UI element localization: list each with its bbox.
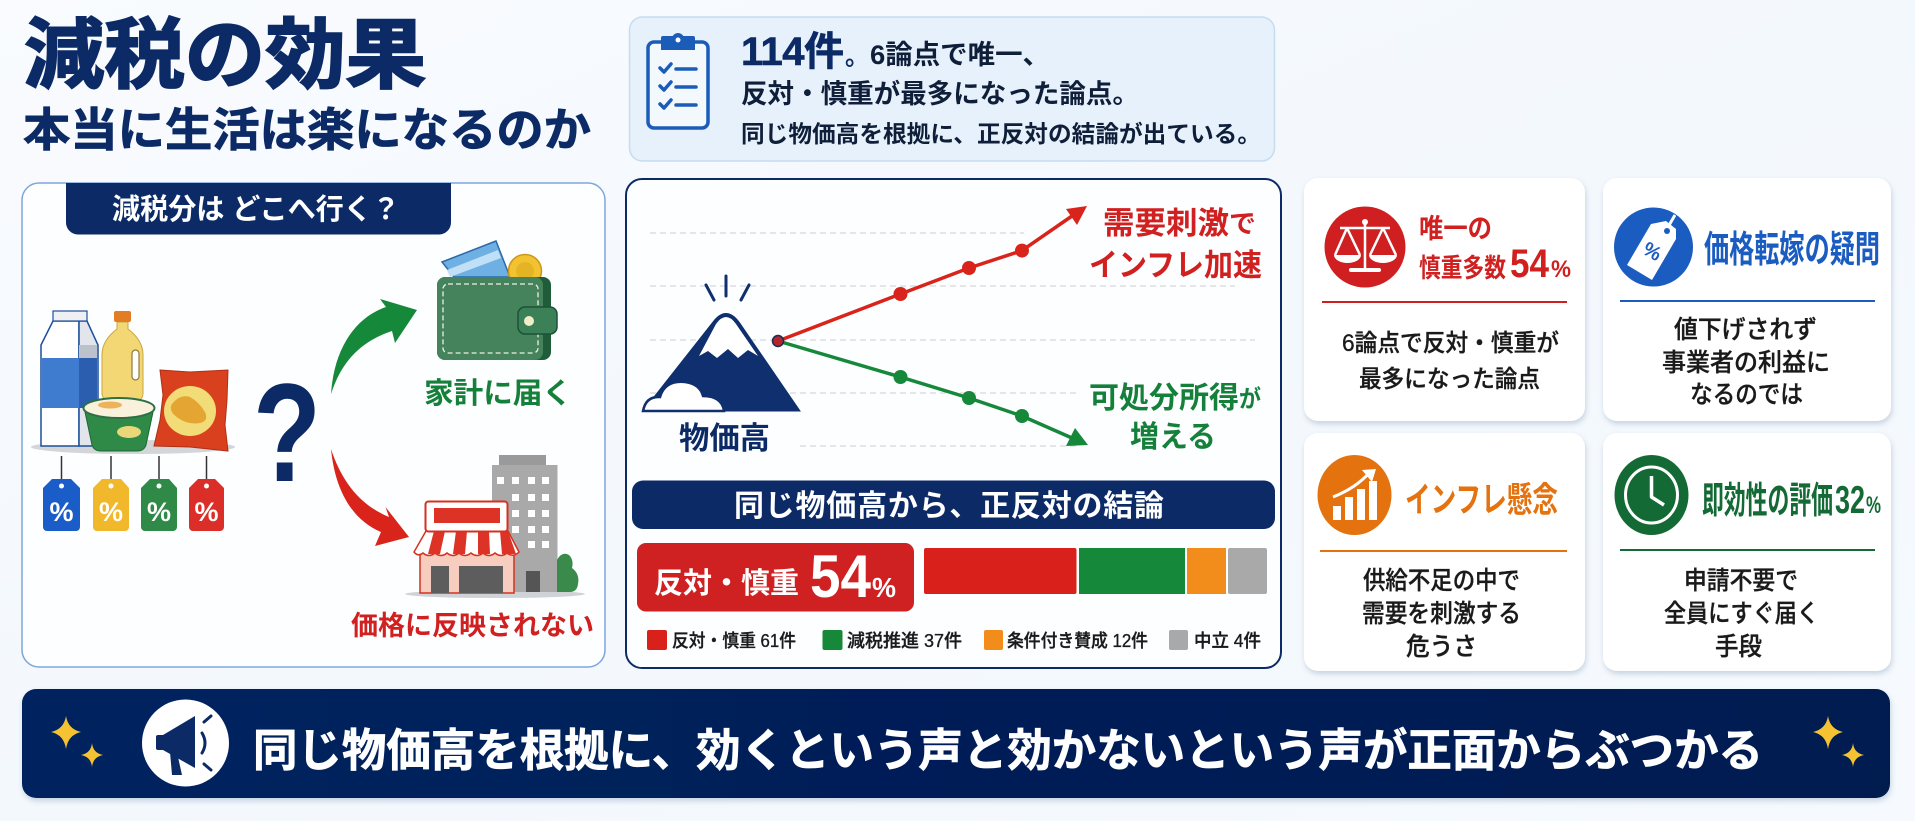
card heading: 32 bbox=[1835, 479, 1865, 522]
icon: rising chart bbox=[1318, 455, 1392, 535]
label: not reflected in prices: 価格に反映されない bbox=[351, 611, 594, 641]
title bbox=[23, 13, 591, 156]
chart legend: 条件付き賛成 12件 bbox=[1007, 631, 1148, 651]
icon: percent tags: % bbox=[49, 497, 74, 527]
banner text: 同じ物価高を根拠に、効くという声と効かないという声が正面からぶつかる bbox=[253, 725, 1763, 776]
chart origin dot bbox=[772, 336, 784, 346]
icon: price tag bbox=[1614, 208, 1693, 286]
card text bbox=[1342, 330, 1559, 393]
card text: 需要を刺激する bbox=[1362, 600, 1521, 628]
panel: same prices, opposite conclusions bbox=[626, 179, 1281, 668]
arrow: green to household bbox=[331, 299, 417, 394]
bottom banner bbox=[22, 689, 1890, 798]
card: price pass-through doubt bbox=[1603, 178, 1891, 421]
summary text: 。 bbox=[845, 41, 869, 71]
summary text: 同じ物価高を根拠に、正反対の結論が出ている。 bbox=[741, 120, 1261, 147]
card heading: 54 bbox=[1510, 242, 1550, 286]
icon: percent tags: % bbox=[147, 497, 171, 527]
icon: percent tags: % bbox=[194, 497, 219, 527]
icon: question mark: ? bbox=[253, 354, 321, 511]
icon: sparkles right bbox=[1813, 716, 1864, 767]
icon: clock bbox=[1614, 455, 1688, 535]
icon: percent tags bbox=[43, 456, 224, 531]
card heading: 唯一の bbox=[1419, 214, 1492, 244]
icon: shop and office building bbox=[405, 455, 585, 598]
icon: wallet bbox=[437, 241, 557, 360]
badge: opposition 54%: 54 bbox=[810, 543, 872, 610]
icon: clipboard bbox=[648, 33, 708, 128]
summary text bbox=[741, 30, 1261, 147]
chart line: green down bbox=[778, 341, 1088, 446]
label: disposable income bbox=[1089, 382, 1261, 454]
card heading: % bbox=[1551, 256, 1571, 283]
label: demand stimulus: 需要刺激 bbox=[1103, 206, 1229, 241]
label: demand stimulus: で bbox=[1229, 209, 1256, 239]
icon: groceries bbox=[31, 311, 235, 454]
conclusion banner bbox=[632, 480, 1275, 529]
card text bbox=[1362, 567, 1521, 661]
chart legend bbox=[647, 630, 1261, 651]
panel heading bbox=[66, 183, 451, 234]
label: disposable income: が bbox=[1239, 385, 1261, 413]
arrow: red to shop bbox=[331, 449, 409, 546]
card: inflation concern bbox=[1304, 433, 1585, 671]
panel heading: 減税分は どこへ行く？ bbox=[112, 193, 400, 226]
title: 本当に生活は楽になるのか bbox=[23, 104, 591, 156]
icon: sparkles left bbox=[51, 716, 103, 767]
card heading: 慎重多数 bbox=[1419, 253, 1506, 283]
stacked bar chart bbox=[924, 548, 1267, 594]
summary text: 114件 bbox=[741, 30, 844, 74]
icon: mountain bbox=[643, 276, 800, 411]
chart legend: 中立 4件 bbox=[1194, 631, 1261, 651]
chart legend: 減税推進 37件 bbox=[847, 631, 962, 651]
label: demand stimulus: インフレ加速 bbox=[1089, 248, 1262, 283]
card text bbox=[1662, 316, 1830, 409]
card heading: % bbox=[1866, 492, 1881, 519]
card text: なるのでは bbox=[1690, 381, 1803, 409]
icon: megaphone bbox=[142, 700, 229, 786]
card text: 最多になった論点 bbox=[1359, 366, 1540, 393]
chart legend: 反対・慎重 61件 bbox=[672, 631, 796, 651]
summary text: 反対・慎重が最多になった論点。 bbox=[741, 79, 1139, 109]
card text: 危うさ bbox=[1406, 633, 1477, 661]
icon: scales bbox=[1324, 206, 1406, 288]
card: immediacy evaluation bbox=[1603, 433, 1891, 671]
label: demand stimulus bbox=[1089, 206, 1262, 283]
badge: opposition 54% bbox=[637, 543, 914, 612]
summary box bbox=[630, 17, 1274, 161]
card text: 全員にすぐ届く bbox=[1664, 600, 1819, 628]
card text bbox=[1664, 567, 1819, 661]
summary text: 6論点で唯一、 bbox=[870, 40, 1050, 70]
label: reaches households: 家計に届く bbox=[424, 377, 572, 410]
card: only cautious majority bbox=[1304, 178, 1585, 421]
conclusion banner: 同じ物価高から、正反対の結論 bbox=[734, 490, 1164, 523]
badge: opposition 54%: % bbox=[872, 572, 896, 603]
badge: opposition 54%: 反対・慎重 bbox=[654, 567, 799, 600]
icon: price tag: % bbox=[1639, 238, 1665, 266]
card heading bbox=[1419, 214, 1571, 286]
title: 減税の効果 bbox=[24, 13, 426, 99]
card text: 事業者の利益に bbox=[1662, 349, 1830, 377]
card text: 申請不要で bbox=[1684, 567, 1798, 595]
card text: 6論点で反対・慎重が bbox=[1342, 330, 1559, 357]
label: prices: 物価高 bbox=[679, 421, 770, 456]
chart line: red up bbox=[778, 206, 1087, 341]
card text: 供給不足の中で bbox=[1363, 567, 1520, 595]
card heading: インフレ懸念 bbox=[1405, 481, 1558, 520]
label: disposable income: 可処分所得 bbox=[1089, 382, 1239, 415]
card text: 値下げされず bbox=[1674, 316, 1817, 344]
panel: where the tax cut goes bbox=[22, 183, 605, 667]
card text: 手段 bbox=[1715, 633, 1762, 661]
icon: percent tags: % bbox=[99, 497, 123, 527]
label: disposable income: 増える bbox=[1130, 421, 1216, 454]
